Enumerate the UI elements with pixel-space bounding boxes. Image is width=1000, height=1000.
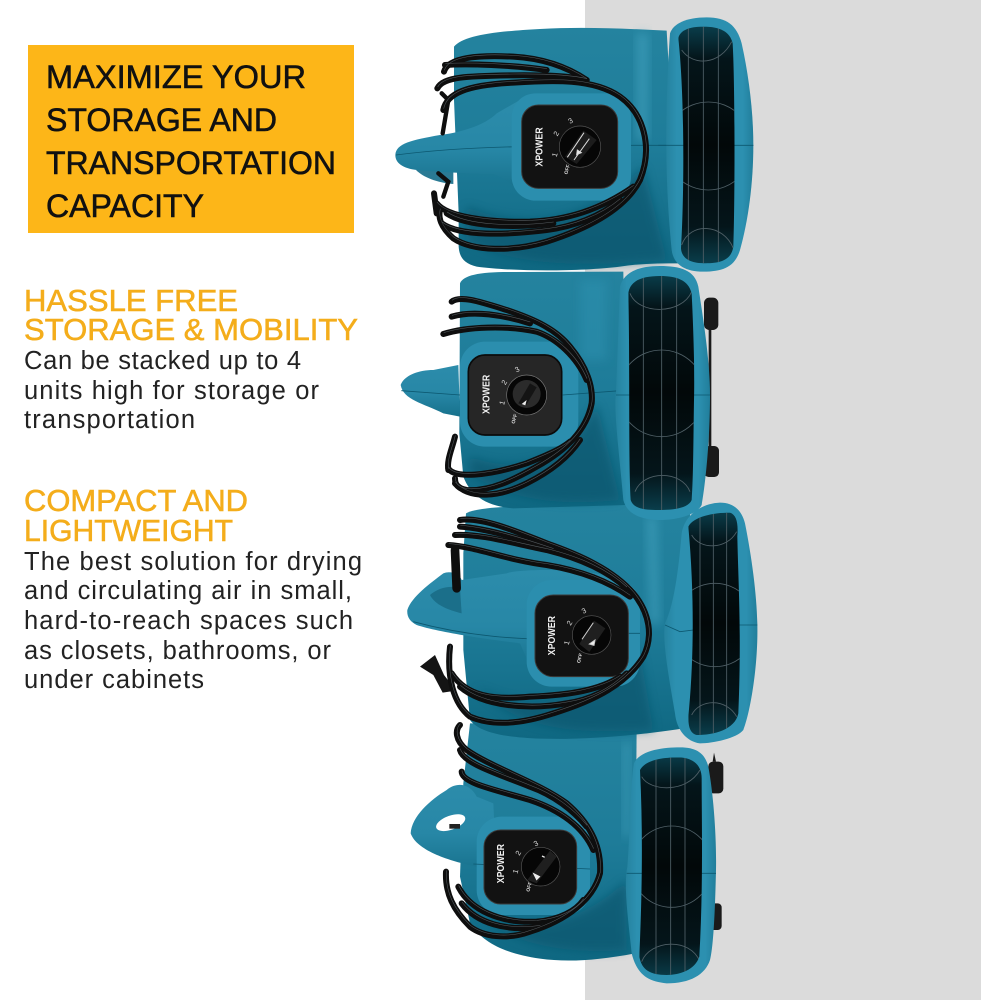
plate	[477, 817, 590, 915]
plug	[420, 655, 456, 693]
section body text: transportation	[24, 406, 195, 434]
plate	[512, 93, 631, 201]
speed labels: OFF	[525, 881, 534, 893]
speed labels	[550, 116, 575, 175]
speed labels	[497, 365, 521, 425]
vent opening	[688, 512, 740, 735]
speed labels: 1	[497, 400, 507, 406]
control panel	[484, 830, 577, 904]
speed labels: 1	[562, 640, 572, 646]
handle	[411, 785, 497, 873]
handle	[395, 100, 520, 190]
speed labels: OFF	[511, 413, 519, 425]
section body text: and circulating air in small,	[24, 577, 352, 605]
knob	[507, 375, 547, 415]
grey background panel	[585, 0, 981, 1000]
speed labels: 2	[513, 849, 523, 857]
plate	[460, 342, 578, 447]
vent opening	[678, 26, 734, 264]
speed labels: 2	[565, 619, 574, 627]
speed labels	[562, 606, 588, 664]
section body text: as closets, bathrooms, or	[24, 637, 332, 665]
vent opening	[628, 276, 694, 510]
unit 1: top air mover	[395, 17, 753, 272]
section: compact and lightweight	[24, 483, 362, 694]
handle opening	[434, 811, 467, 834]
section body text: Can be stacked up to 4	[24, 347, 301, 375]
section body text	[24, 548, 362, 694]
power cord	[446, 725, 600, 936]
knob	[559, 126, 601, 167]
body	[454, 28, 680, 270]
unit 3: third air mover	[407, 503, 757, 743]
body shading	[477, 517, 660, 731]
power cord	[434, 56, 646, 249]
speed labels: 1	[550, 152, 560, 158]
vent housing	[666, 17, 753, 272]
vent housing	[615, 266, 710, 520]
air mover stack	[395, 17, 757, 983]
section body text: under cabinets	[24, 666, 204, 694]
section: hassle free storage and mobility	[24, 283, 358, 434]
callout heading: MAXIMIZE YOUR	[46, 59, 306, 95]
section heading: HASSLE FREE	[24, 283, 238, 318]
speed labels	[511, 839, 540, 893]
speed labels: 3	[513, 365, 521, 374]
power cord	[443, 299, 592, 495]
handle recess	[430, 587, 462, 613]
speed labels: 2	[499, 378, 509, 386]
body	[460, 723, 637, 961]
body	[459, 272, 627, 508]
section heading: STORAGE & MOBILITY	[24, 312, 358, 347]
rear feet	[708, 753, 723, 930]
rear feet	[704, 298, 719, 477]
speed labels: 3	[580, 606, 588, 616]
section body text: hard-to-reach spaces such	[24, 607, 353, 635]
body	[463, 505, 690, 739]
control panel	[535, 595, 628, 677]
vent housing	[664, 503, 757, 743]
callout heading	[46, 59, 336, 224]
callout heading: TRANSPORTATION	[46, 145, 336, 181]
brand: XPOWER	[547, 616, 558, 655]
body shading	[470, 280, 620, 502]
body shading	[480, 743, 630, 951]
section heading	[24, 483, 248, 548]
speed labels: OFF	[563, 164, 572, 175]
section body text: The best solution for drying	[24, 548, 362, 576]
vent opening	[639, 758, 702, 975]
knob	[572, 616, 611, 654]
brand: XPOWER	[481, 375, 492, 414]
callout heading: CAPACITY	[46, 188, 204, 224]
unit 4: bottom air mover	[411, 723, 723, 983]
speed labels: 1	[511, 868, 520, 875]
knob	[521, 847, 560, 886]
section body text	[24, 347, 320, 434]
section body text: units high for storage or	[24, 377, 320, 405]
control panel	[468, 355, 562, 435]
handle	[407, 570, 640, 673]
speed labels: 3	[566, 116, 575, 126]
handle nub	[401, 365, 460, 417]
control panel	[522, 105, 618, 188]
unit 2: second air mover	[401, 266, 719, 520]
power cord	[448, 519, 649, 723]
brand: XPOWER	[496, 844, 507, 883]
callout heading: STORAGE AND	[46, 102, 277, 138]
callout: maximize your storage and transportation capacity	[28, 45, 354, 233]
brand: XPOWER	[535, 127, 546, 167]
speed labels: 3	[532, 839, 540, 848]
vent housing	[626, 747, 716, 983]
callout box	[28, 45, 354, 233]
section heading	[24, 283, 358, 347]
body shading	[467, 33, 667, 264]
lower handle lip	[416, 169, 453, 184]
section heading: COMPACT AND	[24, 483, 248, 518]
plate	[527, 580, 640, 687]
speed labels: 2	[551, 130, 561, 138]
speed labels: OFF	[576, 653, 585, 664]
section heading: LIGHTWEIGHT	[24, 513, 233, 548]
